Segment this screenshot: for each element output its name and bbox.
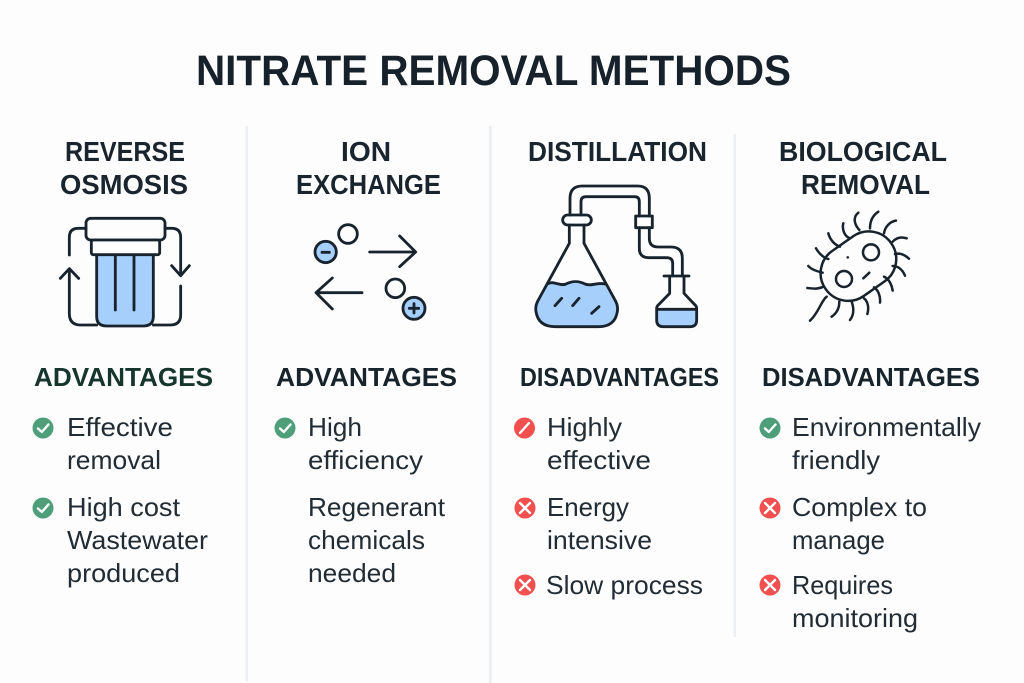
heading: biological removal: REMOVAL <box>801 169 930 200</box>
heading: reverse osmosis: OSMOSIS <box>60 169 188 200</box>
list item: environmentally friendly: Environmentally <box>792 412 981 442</box>
heading: ion exchange <box>296 136 441 200</box>
list item: high efficiency: High <box>308 412 362 442</box>
list item: complex to manage <box>760 492 927 555</box>
heading: biological removal: BIOLOGICAL <box>779 136 947 167</box>
list item: effective removal: Effective <box>67 412 173 442</box>
panel: biological removal <box>760 136 981 633</box>
heading: ion exchange: EXCHANGE <box>296 169 441 200</box>
list item: highly effective: Highly <box>547 412 622 442</box>
disadvantages heading: DISADVANTAGES <box>762 362 980 392</box>
panel: reverse osmosis <box>32 136 213 588</box>
list item: regenerant chemicals needed: needed <box>308 558 396 588</box>
list item: high cost, wastewater produced: produced <box>67 558 180 588</box>
list item: environmentally friendly: friendly <box>792 445 880 475</box>
panel: distillation <box>514 136 719 600</box>
list item: complex to manage: manage <box>792 525 885 555</box>
list item: energy intensive <box>514 492 652 555</box>
list item: regenerant chemicals needed <box>308 492 446 588</box>
icon: water filter cartridge <box>60 218 189 326</box>
list item: energy intensive: Energy <box>547 492 629 522</box>
list item: high cost, wastewater produced <box>32 492 208 588</box>
advantages heading: ADVANTAGES <box>34 362 213 392</box>
list item: complex to manage: Complex to <box>792 492 927 522</box>
list item: regenerant chemicals needed: chemicals <box>308 525 425 555</box>
list item: effective removal: removal <box>67 445 161 475</box>
list item: effective removal <box>32 412 173 475</box>
list item: highly effective: effective <box>547 445 651 475</box>
list item: highly effective <box>514 412 651 475</box>
list item: high cost, wastewater produced: High cost <box>67 492 181 522</box>
list item: requires monitoring: monitoring <box>792 603 918 633</box>
list item: environmentally friendly <box>760 412 981 475</box>
list item: slow process: Slow process <box>546 570 703 600</box>
panel: ion exchange <box>274 136 457 588</box>
title: NITRATE REMOVAL METHODS <box>196 47 791 95</box>
list item: regenerant chemicals needed: Regenerant <box>308 492 446 522</box>
icon: ion exchange arrows <box>315 225 425 319</box>
list item: requires monitoring <box>760 570 918 633</box>
list item: energy intensive: intensive <box>547 525 652 555</box>
advantages heading: ADVANTAGES <box>276 362 457 392</box>
heading: ion exchange: ION <box>341 136 391 167</box>
icon: bacterium <box>807 212 909 321</box>
list item: high efficiency <box>274 412 423 475</box>
heading: distillation: DISTILLATION <box>528 136 707 167</box>
list item: requires monitoring: Requires <box>792 570 893 600</box>
list item: high cost, wastewater produced: Wastewater <box>67 525 208 555</box>
heading: reverse osmosis <box>60 136 188 200</box>
list item: high efficiency: efficiency <box>308 445 423 475</box>
heading: biological removal <box>779 136 947 200</box>
icon: distillation flasks <box>536 186 697 327</box>
disadvantages heading: DISADVANTAGES <box>520 362 719 392</box>
heading: reverse osmosis: REVERSE <box>65 136 185 167</box>
